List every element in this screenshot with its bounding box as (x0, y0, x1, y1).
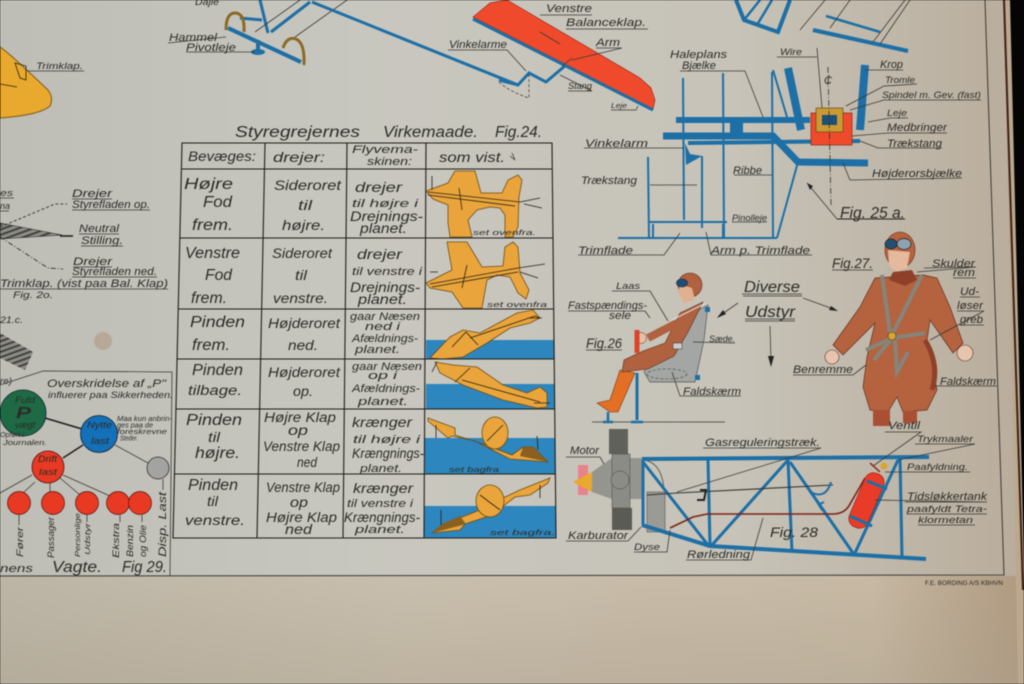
left: trim flap diagram Fig. 20: Trimklap. (vist paa Bal. Klap) (0, 278, 168, 290)
table row: right foot forward: Drejnings- (350, 209, 424, 224)
labels: Fig. 25a: Fig. 25 a. (840, 205, 905, 222)
labels: Fig. 28: Fig. 28 (770, 525, 819, 540)
left: hatched section Fig. 21c: 21.c. (0, 315, 23, 326)
notes: load tree: foreskrevne (117, 427, 167, 436)
labels: Fig. 25a: Trækstang (887, 138, 943, 150)
table row: right foot forward: frem. (192, 217, 233, 234)
labels: Fig. 26: Fig.26 (586, 336, 622, 351)
table row: right foot forward: højre. (282, 218, 325, 233)
table row: stick right: til (208, 430, 221, 445)
node: payload: last (91, 436, 109, 447)
table row: left foot forward (185, 245, 423, 307)
labels: Fig. 25a: Ribbe (733, 165, 762, 177)
parachute harness straps (866, 275, 925, 372)
throttle linkage and fuel line (647, 478, 865, 528)
figure: rudder pedal mechanism at top: Hammel (169, 32, 218, 44)
labels: Fig. 28: Rørledning (687, 549, 751, 561)
icon: plane top view turning right (426, 171, 542, 237)
table row: stick left: ned (285, 522, 313, 537)
labels: Fig. 25a (578, 47, 981, 257)
labels: Fig. 28: Motor (570, 445, 600, 457)
panel: load tree Fig. 29 (0, 371, 173, 576)
table row: stick back: gaar Næsen (352, 361, 422, 373)
table row: left foot forward: frem. (191, 290, 227, 307)
labels: Fig. 27: Ud- (960, 286, 979, 298)
figure: left balance flap with linkage: Leje (611, 101, 627, 110)
table row: left foot forward: Sideroret (272, 246, 333, 261)
table grid (173, 143, 556, 538)
notes: load tree: Vagte. (52, 559, 102, 576)
labels: Fig. 28: Karburator (568, 530, 630, 542)
labels: Fig. 28: klormetan (918, 515, 973, 526)
table row: stick back: Højderoret (268, 365, 341, 380)
notes: load tree: Ekstra (111, 523, 122, 558)
table row: stick back: Afældnings- (351, 383, 420, 395)
heading: miscellaneous equipment with arrows: Udstyr (745, 304, 796, 321)
labels: Fig. 25a: Medbringer (887, 122, 948, 134)
left: trim flap diagram Fig. 20: Neutral (79, 223, 120, 235)
table row: stick left: planet. (353, 524, 405, 536)
icon: plane from behind banking right: set bagfra (449, 465, 499, 474)
labels: Fig. 28: Paafyldning. (907, 462, 968, 473)
node: operating load: last (39, 467, 57, 478)
icon: yellow tail section with trim flap (0, 47, 84, 118)
printer's imprint: F.E. BORDING A/S KBHVN (925, 581, 1003, 587)
notes: load tree: Disp. Last (157, 491, 169, 557)
table row: stick right: ned (297, 455, 317, 470)
left: trim flap diagram Fig. 20 (0, 188, 168, 301)
labels: Fig. 25a: Tromle (885, 75, 915, 86)
table row: stick forward (190, 311, 420, 356)
labels: Fig. 26 (568, 281, 741, 398)
figure: seated pilot Fig. 26 (568, 273, 741, 422)
table: control action illustrations (173, 143, 556, 538)
labels: Fig. 25a: Trækstang (581, 175, 638, 187)
node: full weight (0, 390, 46, 436)
labels: Fig. 28: Trykmaaler (917, 434, 974, 445)
labels: Fig. 28: Gasreguleringstræk. (705, 437, 820, 449)
node: full weight: Fuld (15, 395, 36, 406)
table row: left foot forward: til (295, 268, 308, 283)
labels: Fig. 25a: Haleplans (670, 49, 728, 61)
table row: left foot forward: Drejnings- (350, 280, 421, 295)
icon: yellow tail section with trim flap: Trimklap. (36, 61, 83, 72)
labels: Fig. 25a: Leje (887, 108, 907, 119)
table header row: Bevæges: (188, 149, 256, 164)
labels: Fig. 27 (793, 256, 996, 388)
left: trim flap diagram Fig. 20: Stilling. (81, 235, 123, 247)
engine (573, 429, 665, 532)
figure: blue tail frame at top right (736, 0, 910, 51)
table row: left foot forward: drejer (357, 247, 403, 262)
figure: left balance flap with linkage: Venstre (546, 3, 592, 15)
figure: rudder pedal mechanism at top (168, 0, 347, 65)
table row: stick back: Pinden (192, 362, 243, 379)
table row: stick forward: Afældnings- (351, 333, 418, 345)
labels: Fig. 25a: Højderorsbjælke (872, 168, 962, 180)
left: trim flap diagram Fig. 20: Drejer (72, 188, 114, 200)
notes: load tree: Steder. (120, 434, 138, 442)
icon: red extinguisher tank (846, 462, 888, 531)
notes: load tree: ges paa de (117, 420, 153, 430)
table row: stick back (188, 361, 422, 408)
labels: Fig. 25a: Trimflade (578, 245, 633, 257)
figure: engine and fire extinguisher system Fig. 28 (566, 420, 988, 561)
figure: left balance flap with linkage: Arm (595, 37, 620, 49)
icon: plane top view turning left (426, 242, 547, 309)
node: operating load: Drift (38, 454, 57, 465)
table header row: som vist. (439, 150, 505, 165)
heading: miscellaneous equipment with arrows: Diverse (744, 279, 800, 296)
tree connector lines (0, 418, 163, 525)
table row: stick left: Krængnings- (344, 510, 420, 525)
pilot coat (833, 275, 963, 412)
table row: stick left: til venstre i (347, 498, 414, 510)
node: operating load (32, 451, 64, 483)
table row: right foot forward: til (298, 198, 313, 213)
labels: Fig. 25a: Krop (880, 59, 903, 71)
notes: load tree: og Olie (138, 525, 149, 557)
labels: Fig. 28: paafyldt Tetra- (906, 504, 987, 515)
node: full weight: P (16, 405, 32, 422)
labels: Fig. 27: Faldskærm (940, 376, 996, 388)
table row: stick left: Pinden (188, 477, 238, 494)
table row: right foot forward: drejer (355, 180, 403, 195)
labels: Fig. 25a: Wire (780, 47, 802, 58)
labels: Fig. 27: greb (960, 314, 983, 326)
icon: plane from behind banking left (432, 478, 555, 537)
labels: Fig. 26: Laas (616, 281, 640, 292)
table row: stick back: op. (293, 384, 313, 399)
labels: Fig. 25a: Arm p. Trimflade (710, 245, 810, 257)
heading: table title Fig. 24 (235, 124, 542, 141)
labels: Fig. 25a: Vinkelarm (585, 138, 648, 150)
table row: left foot forward: Fod (205, 267, 233, 284)
table row: stick left: krænger (353, 481, 414, 496)
labels: Fig. 28: Dyse (634, 542, 660, 553)
table row: stick forward: ned. (288, 338, 318, 353)
notes: load tree: Opført i (0, 430, 24, 439)
table row: stick back: op i (368, 370, 398, 382)
notes: load tree: Fører (15, 526, 26, 557)
notes: load tree: Passager (46, 516, 57, 558)
labels: Fig. 26: Faldskærm (683, 386, 741, 398)
table row: stick right: Venstre Klap (263, 439, 340, 454)
labels: Fig. 28: Tidsløkkertank (907, 491, 988, 503)
table row: stick right: højre. (195, 445, 240, 462)
table row: stick right: op (288, 423, 309, 438)
notes: load tree: Fig 29. (122, 559, 167, 576)
figure: standing pilot Fig. 27 (793, 232, 997, 426)
figure: elevator and trim mechanism Fig. 25a (578, 47, 981, 257)
node: full weight: vægt (15, 420, 35, 431)
icon: plane top view turning right: set ovenfra. (473, 228, 536, 237)
icon: plane top view turning left: set ovenfra (487, 300, 547, 309)
table row: right foot forward: planet. (359, 221, 407, 236)
notes: load tree: Personlige (73, 513, 82, 557)
labels: Fig. 25a: Bjælke (682, 60, 716, 72)
notes: load tree (0, 378, 173, 576)
node: payload: Nytte (87, 420, 112, 431)
icon: plane nose down (430, 310, 542, 359)
labels: Fig. 26: sele (609, 310, 631, 322)
table row: stick forward: frem. (192, 337, 230, 354)
labels: Fig. 28: Ventil (888, 420, 921, 432)
heading: table title Fig. 24: Styregrejernes (235, 124, 360, 141)
left: hatched section Fig. 21c: re) (0, 376, 12, 387)
figure: left balance flap with linkage: Stang (568, 81, 593, 92)
labels: Fig. 27: Skulder (932, 258, 977, 270)
table row: stick forward: Pinden (190, 314, 245, 331)
table row: stick back: planet. (356, 396, 408, 408)
notes: load tree: Maa kun anbrin- (117, 414, 173, 423)
icon: plane from behind banking right (428, 417, 548, 474)
notes: load tree: nens (0, 563, 34, 575)
blue fuselage frame (642, 457, 929, 559)
labels: Fig. 25a: Pinolleje (732, 213, 767, 224)
node: disposable load (147, 457, 169, 479)
table row: stick left: venstre. (185, 513, 245, 528)
table header row (188, 144, 515, 168)
table row: stick right: Krængnings- (352, 446, 424, 461)
table row: stick forward: gaar Næsen (350, 311, 420, 323)
table row: stick forward: planet. (354, 344, 400, 356)
icon: plane nose up (432, 362, 550, 408)
figure: left balance flap with linkage: Balanceklap. (566, 17, 646, 29)
table row: stick left: til (207, 494, 219, 509)
notes: load tree: Udstyr (83, 522, 92, 555)
table row: right foot forward: Sideroret (274, 178, 343, 193)
seat (644, 305, 708, 382)
notes: load tree: Benzin (125, 525, 136, 557)
heading: miscellaneous equipment with arrows (717, 279, 838, 367)
heading: table title Fig. 24: Virkemaade. (383, 124, 478, 141)
table row: stick right: Højre Klap (264, 410, 337, 425)
labels: Fig. 27: løser (957, 300, 984, 312)
table row: left foot forward: planet. (357, 292, 407, 307)
left: trim flap diagram Fig. 20: Fig. 2o. (13, 290, 53, 301)
table row: right foot forward: Højre (184, 176, 233, 193)
figure: left balance flap with linkage: Vinkelarme (449, 39, 507, 51)
left: hatched section Fig. 21c (0, 315, 33, 387)
notes: load tree: Journalen. (2, 438, 47, 447)
table header row: Flyvema- (352, 144, 418, 156)
table row: stick left: Højre Klap (266, 510, 338, 525)
left: trim flap diagram Fig. 20: Styrefladen op. (72, 199, 150, 211)
labels: Fig. 26: Sæde. (709, 334, 735, 345)
table row: left foot forward: venstre. (273, 291, 328, 306)
table row: stick right: til højre i (353, 434, 421, 446)
heading: table title Fig. 24: Fig.24. (495, 124, 542, 141)
notes: load tree: Overskridelse af „P" (47, 378, 167, 390)
labels: Fig. 25a: ₵ (824, 75, 832, 87)
labels: Fig. 26: Fastspændings- (568, 300, 647, 312)
table row: stick left: op (290, 495, 309, 510)
table row: stick right (186, 410, 424, 475)
left: trim flap diagram Fig. 20: es (0, 188, 13, 199)
table row: left foot forward: Venstre (185, 245, 240, 262)
labels: Fig. 27: rem (953, 267, 975, 279)
table row: right foot forward (184, 176, 424, 236)
table row: stick forward: ned i (365, 321, 401, 333)
table row: right foot forward: til højre i (352, 198, 419, 210)
labels: Fig. 28 (568, 420, 988, 561)
boot and leg (597, 370, 635, 412)
icon: plane from behind banking left: set bagfra. (490, 528, 555, 537)
structure: blue beams (618, 65, 868, 238)
node: payload (80, 416, 118, 452)
table row: stick right: krænger (352, 415, 413, 430)
figure: rudder pedal mechanism at top: Pivotleje (186, 42, 236, 54)
left: trim flap diagram Fig. 20: na (0, 201, 10, 212)
table row: stick forward: Højderoret (268, 316, 341, 331)
notes: load tree: influerer paa Sikkerheden. (48, 390, 173, 401)
table row: stick left: Venstre Klap (266, 480, 340, 495)
labels: Fig. 27: Fig.27. (832, 256, 873, 271)
pilot body (622, 302, 703, 372)
table row: right foot forward: Fod (203, 194, 233, 211)
figure: left balance flap with linkage (312, 0, 655, 110)
labels: Fig. 27: Benremme (793, 364, 853, 376)
table row: stick right: planet. (359, 463, 402, 475)
icon: red drum housing (811, 108, 852, 145)
table header row: skinen: (367, 156, 412, 168)
water fills (424, 340, 556, 538)
table row: stick right: Pinden (186, 412, 242, 429)
labels: Fig. 25a: Spindel m. Gev. (fast) (882, 90, 981, 101)
table row: stick back: tilbage. (188, 383, 242, 398)
left: trim flap diagram Fig. 20: Styrefladen ned. (72, 266, 157, 278)
table row: stick left (185, 477, 420, 537)
leaf nodes (8, 492, 152, 514)
left: trim flap diagram Fig. 20: Drejer (73, 256, 114, 268)
table row: left foot forward: til venstre i (352, 266, 423, 278)
table header row: drejer: (273, 150, 325, 165)
